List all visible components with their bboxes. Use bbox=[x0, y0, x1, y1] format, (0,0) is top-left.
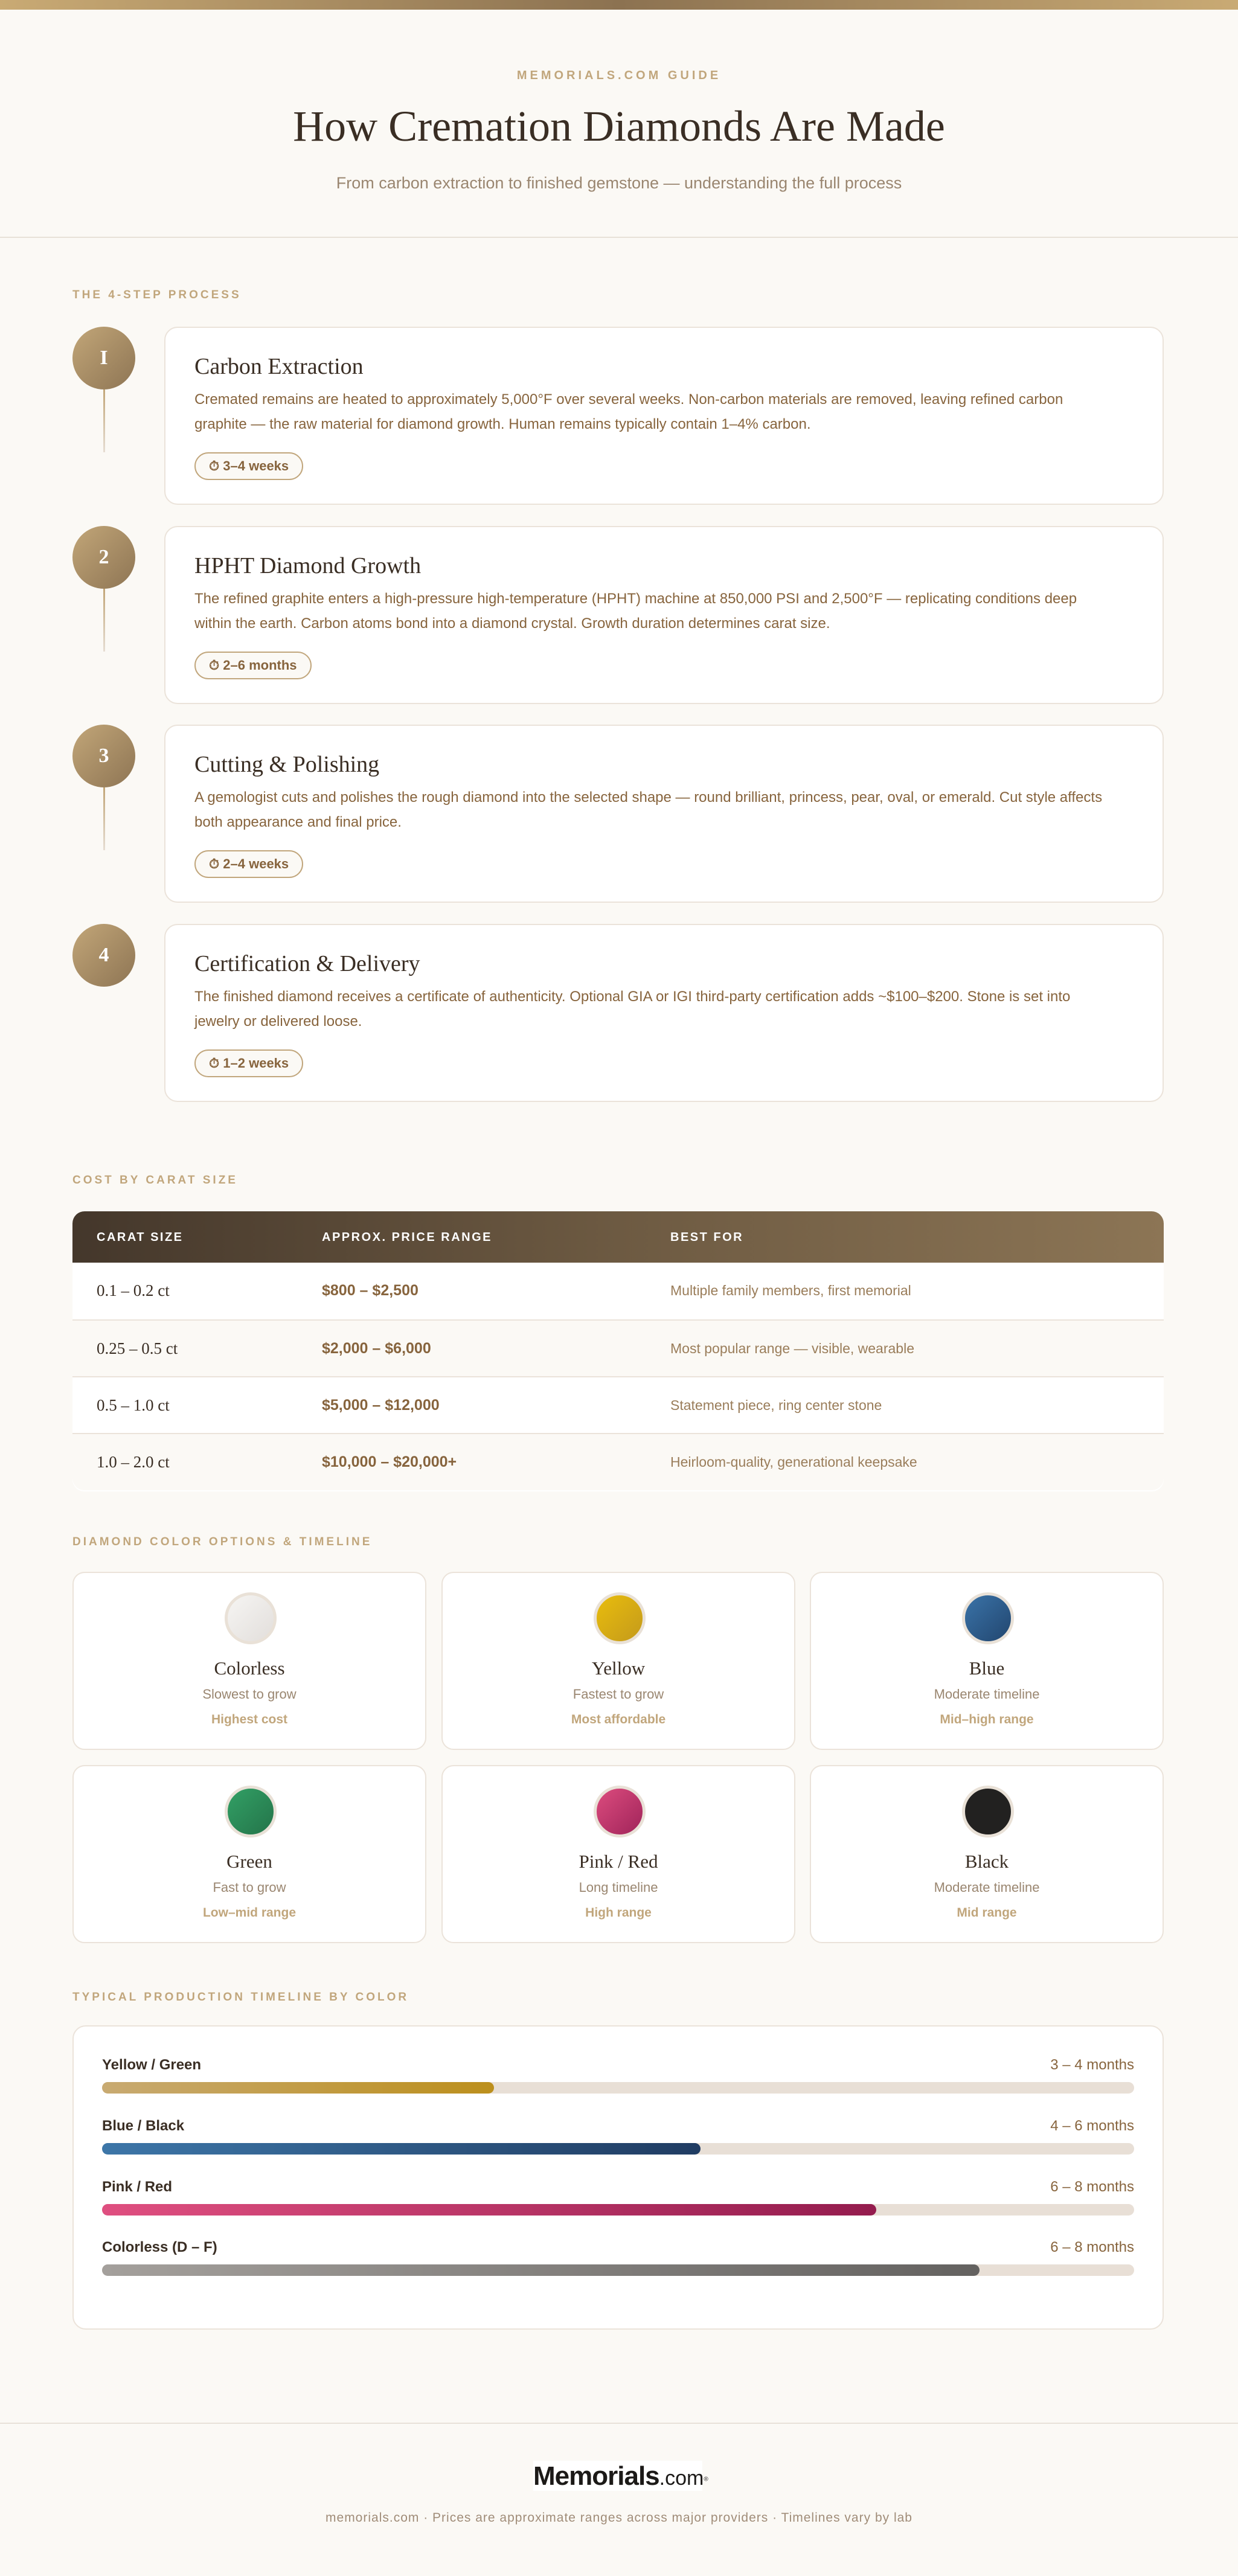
row 2 bbox=[72, 1319, 1164, 1377]
section label: colors: DIAMOND COLOR OPTIONS & TIMELINE bbox=[72, 1536, 372, 1548]
color card: colorless: Slowest to grow bbox=[202, 1687, 297, 1702]
card: certification: The finished diamond receives a certificate of authenticity. Optional GIA or IGI third-party certification adds ~$100–$200. Stone is set into jewelry or delivered loose. bbox=[194, 988, 1070, 1030]
row 4 bbox=[72, 1433, 1164, 1490]
color card: black: Black bbox=[965, 1851, 1009, 1872]
step number 3: 3 bbox=[99, 745, 109, 767]
card: HPHT growth: ⏱ 2–6 months bbox=[209, 658, 297, 673]
color card: yellow: Yellow bbox=[592, 1658, 645, 1679]
step 2 bbox=[72, 526, 1164, 704]
color card: yellow: Fastest to grow bbox=[573, 1687, 664, 1702]
row 1: $800 – $2,500 bbox=[322, 1282, 419, 1299]
bar: yellow/green: Yellow / Green bbox=[102, 2057, 201, 2073]
row 4: Heirloom-quality, generational keepsake bbox=[670, 1454, 917, 1470]
card: carbon extraction bbox=[164, 327, 1164, 505]
section label: process: THE 4-STEP PROCESS bbox=[72, 289, 242, 301]
color card: pink: Long timeline bbox=[579, 1880, 658, 1895]
bar: yellow/green: 3 – 4 months bbox=[1050, 2057, 1134, 2073]
footer note: memorials.com · Prices are approximate ranges across major providers · Timelines vary by lab bbox=[326, 2511, 912, 2525]
step 4 bbox=[72, 924, 1164, 1102]
table header: BEST FOR bbox=[670, 1231, 743, 1244]
eyebrow: MEMORIALS.COM GUIDE bbox=[517, 69, 721, 82]
bar: blue/black: 4 – 6 months bbox=[1050, 2118, 1134, 2134]
bar: colorless: Colorless (D – F) bbox=[102, 2239, 217, 2255]
cost table bbox=[72, 1211, 1164, 1491]
card: carbon extraction: Carbon Extraction bbox=[194, 354, 364, 379]
step number 4: 4 bbox=[99, 944, 109, 966]
color card: blue: Moderate timeline bbox=[934, 1687, 1039, 1702]
step 3 bbox=[72, 725, 1164, 903]
title: How Cremation Diamonds Are Made bbox=[293, 102, 945, 150]
row 1: Multiple family members, first memorial bbox=[670, 1283, 911, 1298]
color card: green bbox=[72, 1765, 426, 1943]
step 1 bbox=[72, 327, 1164, 505]
card: cutting: Cutting & Polishing bbox=[194, 752, 379, 777]
card: cutting bbox=[164, 725, 1164, 903]
step number 2 bbox=[72, 526, 135, 589]
row 3: 0.5 – 1.0 ct bbox=[97, 1396, 170, 1414]
step number 1: I bbox=[100, 347, 108, 369]
color card: blue: Mid–high range bbox=[940, 1713, 1034, 1726]
bar: yellow/green bbox=[102, 2057, 1134, 2094]
row 4: 1.0 – 2.0 ct bbox=[97, 1453, 170, 1471]
bar: pink/red: Pink / Red bbox=[102, 2179, 172, 2195]
card: certification: ⏱ 1–2 weeks bbox=[209, 1056, 289, 1071]
card: carbon extraction: ⏱ 3–4 weeks bbox=[209, 458, 289, 473]
row 3: $5,000 – $12,000 bbox=[322, 1397, 440, 1414]
bar: pink/red bbox=[102, 2179, 1134, 2216]
row 3: Statement piece, ring center stone bbox=[670, 1397, 882, 1413]
row 4: $10,000 – $20,000+ bbox=[322, 1453, 457, 1470]
color card: blue: Blue bbox=[969, 1658, 1004, 1679]
table header: CARAT SIZE bbox=[97, 1231, 184, 1244]
row 2: 0.25 – 0.5 ct bbox=[97, 1339, 178, 1357]
color card: pink bbox=[441, 1765, 795, 1943]
color card: black: Mid range bbox=[957, 1906, 1017, 1920]
table header bbox=[72, 1211, 1164, 1263]
card: cutting: A gemologist cuts and polishes the rough diamond into the selected shape — round brilliant, princess, pear, oval, or emerald. Cut style affects both appearance and final price. bbox=[194, 789, 1102, 830]
row 1 bbox=[72, 1263, 1164, 1320]
card: HPHT growth bbox=[164, 526, 1164, 704]
color card: green: Low–mid range bbox=[203, 1906, 296, 1920]
logo: Memorials.com® bbox=[533, 2461, 708, 2491]
card: HPHT growth: HPHT Diamond Growth bbox=[194, 553, 421, 578]
step number 1 bbox=[72, 327, 135, 389]
color card: green: Green bbox=[226, 1851, 272, 1872]
card: carbon extraction: Cremated remains are heated to approximately 5,000°F over several weeks. Non-carbon materials are removed, leaving refined carbon graphite — the raw material for diamond growth. Human remains typically contain 1–4% carbon. bbox=[194, 391, 1063, 432]
color card: colorless: Colorless bbox=[214, 1658, 285, 1679]
row 2: Most popular range — visible, wearable bbox=[670, 1341, 914, 1356]
section label: cost: COST BY CARAT SIZE bbox=[72, 1174, 238, 1187]
color card: yellow bbox=[441, 1572, 795, 1750]
step number 4 bbox=[72, 924, 135, 987]
color card: black bbox=[810, 1765, 1164, 1943]
top gradient bar bbox=[0, 0, 1238, 10]
bar: blue/black: Blue / Black bbox=[102, 2118, 184, 2134]
card: HPHT growth: The refined graphite enters a high-pressure high-temperature (HPHT) machine at 850,000 PSI and 2,500°F — replicating conditions deep within the earth. Carbon atoms bond into a diamond crystal. Growth duration determines carat size. bbox=[194, 591, 1077, 632]
step number 2: 2 bbox=[99, 546, 109, 568]
card: certification bbox=[164, 924, 1164, 1102]
section label: timeline: TYPICAL PRODUCTION TIMELINE BY COLOR bbox=[72, 1991, 409, 2004]
color card: black: Moderate timeline bbox=[934, 1880, 1039, 1895]
bar: colorless bbox=[102, 2239, 1134, 2276]
subtitle: From carbon extraction to finished gemstone — understanding the full process bbox=[336, 174, 902, 192]
color card: pink: High range bbox=[585, 1906, 652, 1920]
bar: blue/black bbox=[102, 2118, 1134, 2155]
card: cutting: ⏱ 2–4 weeks bbox=[209, 856, 289, 871]
header bbox=[293, 69, 945, 192]
color card: green: Fast to grow bbox=[213, 1880, 286, 1895]
color card: yellow: Most affordable bbox=[571, 1713, 666, 1726]
timeline chart bbox=[72, 2025, 1164, 2330]
row 2: $2,000 – $6,000 bbox=[322, 1340, 431, 1357]
color card: pink: Pink / Red bbox=[579, 1851, 658, 1872]
row 3 bbox=[72, 1376, 1164, 1434]
card: certification: Certification & Delivery bbox=[194, 951, 420, 976]
bar: pink/red: 6 – 8 months bbox=[1050, 2179, 1134, 2195]
color card: colorless bbox=[72, 1572, 426, 1750]
bar: colorless: 6 – 8 months bbox=[1050, 2239, 1134, 2255]
row 1: 0.1 – 0.2 ct bbox=[97, 1281, 170, 1299]
footer bbox=[326, 2461, 912, 2525]
color card: blue bbox=[810, 1572, 1164, 1750]
step number 3 bbox=[72, 725, 135, 787]
table header: APPROX. PRICE RANGE bbox=[322, 1231, 492, 1244]
color card: colorless: Highest cost bbox=[211, 1713, 287, 1726]
